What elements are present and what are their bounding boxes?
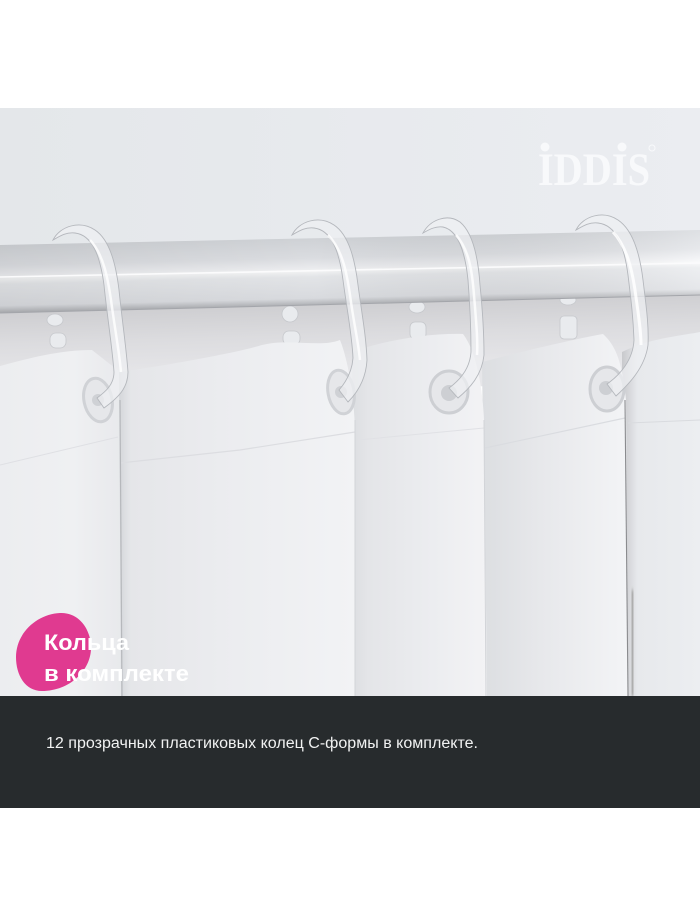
curtain rod — [0, 230, 700, 313]
heading: в комплекте — [44, 661, 189, 686]
ring 1 — [53, 225, 128, 424]
dark caption band — [0, 696, 700, 808]
curtain hooks behind the rod — [47, 295, 577, 348]
curtain panel 5 — [622, 332, 700, 696]
ring 4 — [576, 215, 648, 411]
curtain panel 4 — [482, 334, 628, 696]
ring 3 — [423, 218, 484, 413]
seam lines and fold shadows — [0, 400, 700, 696]
logo: IDDIS: IDDIS — [538, 144, 650, 196]
shadowed wall under the rod — [0, 288, 700, 400]
curtain — [0, 332, 700, 696]
curtain panel 3 — [352, 334, 487, 696]
caption text: 12 прозрачных пластиковых колец С-формы в комплекте. — [46, 735, 478, 752]
ring 2 — [292, 220, 367, 416]
heading: Кольца — [44, 630, 130, 655]
curtain panel 1 — [0, 350, 122, 696]
photo background: wall — [0, 108, 700, 248]
curtain panel 2 — [119, 340, 355, 696]
heading — [44, 630, 189, 686]
pink blob behind heading — [16, 613, 91, 691]
